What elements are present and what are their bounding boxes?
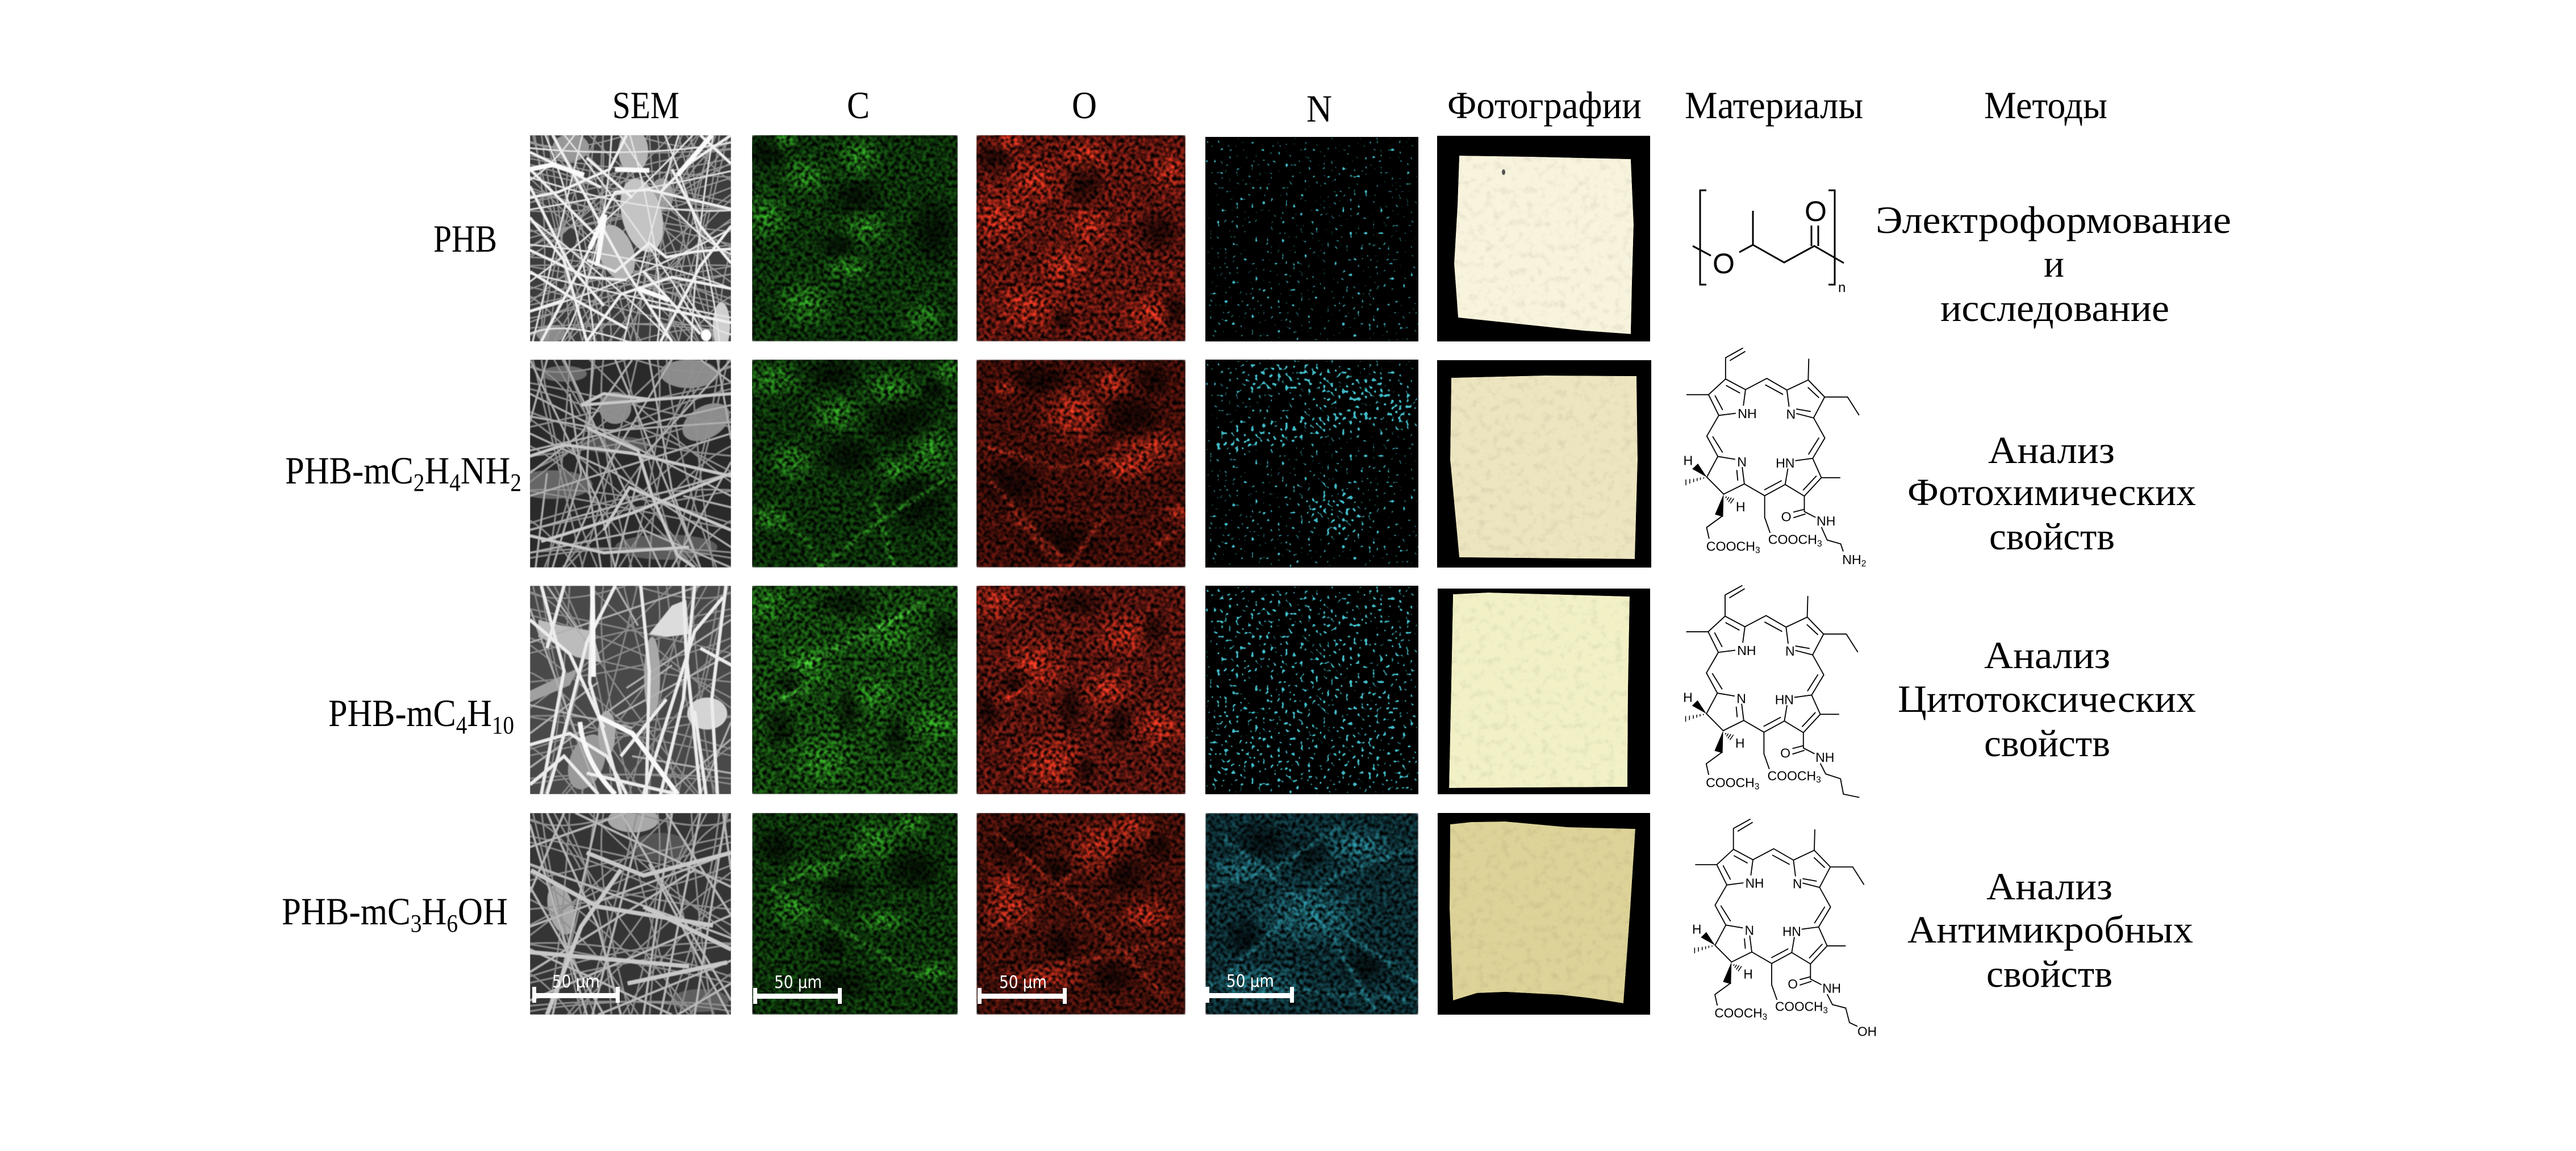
structure: chlorin with butyl tail: O (1780, 746, 1790, 761)
structure: chlorin with ethylenediamine tail: COOCH (1768, 532, 1817, 547)
structure: chlorin with ethylenediamine tail: NH (1842, 552, 1861, 567)
column headers (612, 84, 2107, 130)
header: methods: Методы (1984, 84, 2107, 127)
header: SEM: SEM (612, 84, 679, 127)
structure: chlorin with ethylenediamine tail: NH (1738, 406, 1757, 421)
N map: PHB-mC4H10 (1205, 586, 1418, 794)
label: PHB-mC3H6OH: H (421, 890, 446, 933)
structure: chlorin with ethylenediamine tail: NH (1817, 514, 1835, 528)
methods: antimicrobial analysis: Анализ (1986, 865, 2112, 908)
scale bar: C (753, 973, 842, 1004)
structure: chlorin with butyl tail: H (1683, 690, 1693, 704)
structure: PHB repeat unit: n (1838, 280, 1846, 295)
photo: PHB-mC3H6OH (1438, 813, 1650, 1015)
SEM image: PHB-mC3H6OH (530, 813, 731, 1015)
scale bar: N: 50 µm (1226, 971, 1274, 991)
photo: PHB-mC2H4NH2 (1437, 360, 1651, 568)
C map: PHB-mC3H6OH (752, 813, 958, 1015)
header: O: O (1072, 84, 1097, 127)
structure: PHB repeat unit: O (1713, 248, 1735, 280)
structure: chlorin with ethylenediamine tail: N (1737, 454, 1747, 469)
structure: chlorin with butyl tail: N (1736, 691, 1746, 706)
C map: PHB-mC4H10 (752, 586, 958, 794)
N map: PHB-mC3H6OH (1205, 813, 1418, 1015)
structure: chlorin with hydroxypropyl tail: N (1793, 876, 1802, 891)
O map: PHB (976, 135, 1185, 341)
structure: chlorin with ethylenediamine tail: 3 (1755, 546, 1760, 556)
methods: antimicrobial analysis: свойств (1986, 952, 2112, 995)
scale bar: N (1205, 971, 1294, 1003)
structure: chlorin with ethylenediamine tail: H (1736, 499, 1746, 514)
scale bar: SEM: 50 µm (552, 972, 600, 992)
N map: PHB-mC2H4NH2 (1205, 360, 1418, 568)
row labels (282, 217, 521, 937)
label: PHB-mC3H6OH: 3 (411, 910, 421, 937)
structure: chlorin with hydroxypropyl tail: 3 (1823, 1006, 1828, 1015)
label: PHB-mC3H6OH: OH (458, 890, 508, 933)
label: PHB-mC2H4NH2: 2 (510, 469, 521, 497)
methods: electrospinning: исследование (1940, 286, 2169, 330)
structure: chlorin with ethylenediamine tail: O (1781, 510, 1792, 524)
methods: electrospinning: Электроформование (1876, 198, 2231, 241)
label: PHB-mC4H10: PHB-mC (328, 691, 472, 735)
structure: chlorin with hydroxypropyl tail: O (1788, 977, 1798, 991)
methods: photochemical analysis: свойств (1989, 515, 2115, 558)
SEM image: PHB-mC4H10 (530, 586, 731, 794)
structure: chlorin with ethylenediamine tail: N (1786, 407, 1796, 422)
header: materials: Материалы (1685, 84, 1863, 127)
label: PHB-mC4H10: H (467, 691, 492, 735)
label: PHB-mC2H4NH2: NH (461, 449, 510, 492)
structure: chlorin with butyl tail (1683, 585, 1859, 798)
scale bars (532, 971, 1294, 1004)
label: PHB-mC4H10: 10 (492, 711, 514, 739)
methods: photochemical analysis: Анализ (1988, 428, 2115, 472)
photo: PHB-mC4H10 (1438, 589, 1650, 794)
structure: chlorin with butyl tail: COOCH (1767, 768, 1816, 783)
structure: chlorin with ethylenediamine tail (1684, 348, 1866, 569)
structure: chlorin with ethylenediamine tail: HN (1776, 456, 1795, 470)
methods: cytotoxicity analysis: Цитотоксических (1898, 677, 2196, 720)
label: PHB-mC2H4NH2: 2 (414, 469, 424, 497)
structure: chlorin with butyl tail: 3 (1816, 775, 1821, 785)
structure: chlorin with hydroxypropyl tail: HN (1782, 924, 1801, 939)
photo: PHB (1437, 136, 1650, 341)
structure: chlorin with hydroxypropyl tail: NH (1822, 981, 1841, 995)
N map: PHB (1205, 137, 1418, 341)
structure: chlorin with hydroxypropyl tail: COOCH (1775, 999, 1823, 1014)
scale bar: O (978, 973, 1067, 1004)
O map: PHB-mC3H6OH (976, 813, 1185, 1015)
header: photographs: Фотографии (1447, 84, 1642, 127)
label: PHB-mC2H4NH2: H (424, 449, 449, 492)
C map: PHB-mC2H4NH2 (752, 360, 958, 568)
header: C: C (847, 84, 870, 127)
methods: photochemical analysis: Фотохимических (1907, 470, 2196, 514)
structure: chlorin with butyl tail: NH (1815, 750, 1834, 765)
methods: cytotoxicity analysis: свойств (1984, 722, 2110, 765)
methods: photochemical analysis (1907, 428, 2196, 558)
scale bar: C: 50 µm (774, 973, 822, 992)
structure: PHB repeat unit (1693, 190, 1846, 295)
C map: PHB (752, 135, 958, 341)
structure: chlorin with butyl tail: NH (1737, 643, 1756, 658)
structure: chlorin with hydroxypropyl tail (1692, 819, 1877, 1039)
methods: electrospinning: и (2044, 242, 2064, 285)
structure: chlorin with hydroxypropyl tail: COOCH (1714, 1006, 1763, 1020)
structure: chlorin with butyl tail: N (1785, 644, 1795, 658)
methods: cytotoxicity analysis: Анализ (1984, 633, 2110, 677)
label: PHB-mC3H6OH: PHB-mC (282, 890, 425, 933)
structure: chlorin with ethylenediamine tail: H (1684, 453, 1693, 468)
methods: electrospinning (1876, 198, 2231, 330)
header: N: N (1306, 87, 1332, 130)
structure: PHB repeat unit: O (1805, 195, 1827, 227)
label: PHB: PHB (433, 217, 497, 260)
methods: cytotoxicity analysis (1898, 633, 2196, 765)
structure: chlorin with ethylenediamine tail: COOCH (1706, 539, 1755, 554)
structure: chlorin with ethylenediamine tail: 2 (1861, 559, 1866, 569)
structure: chlorin with hydroxypropyl tail: H (1743, 967, 1753, 982)
structure: chlorin with butyl tail: HN (1775, 692, 1794, 707)
structure: chlorin with butyl tail: H (1735, 736, 1745, 750)
SEM image: PHB (530, 135, 731, 341)
scale bar: O: 50 µm (999, 973, 1047, 992)
structure: chlorin with hydroxypropyl tail: H (1692, 921, 1701, 936)
structure: chlorin with hydroxypropyl tail: 3 (1763, 1012, 1767, 1022)
SEM image: PHB-mC2H4NH2 (530, 360, 731, 568)
structure: chlorin with butyl tail: COOCH (1706, 775, 1755, 790)
scale bar: SEM (532, 972, 620, 1003)
label: PHB-mC4H10: 4 (456, 711, 467, 739)
structure: chlorin with hydroxypropyl tail: NH (1746, 875, 1764, 890)
methods: antimicrobial analysis: Антимикробных (1907, 908, 2193, 951)
structure: chlorin with hydroxypropyl tail: OH (1857, 1024, 1877, 1039)
label: PHB-mC2H4NH2: PHB-mC (285, 449, 429, 492)
label: PHB-mC3H6OH: 6 (446, 910, 458, 937)
label: PHB-mC2H4NH2: 4 (449, 469, 461, 497)
structure: chlorin with ethylenediamine tail: 3 (1817, 539, 1822, 549)
methods: antimicrobial analysis (1907, 865, 2193, 995)
O map: PHB-mC4H10 (976, 586, 1185, 794)
structure: chlorin with hydroxypropyl tail: N (1745, 923, 1754, 938)
O map: PHB-mC2H4NH2 (976, 360, 1185, 568)
structure: chlorin with butyl tail: 3 (1755, 782, 1759, 791)
